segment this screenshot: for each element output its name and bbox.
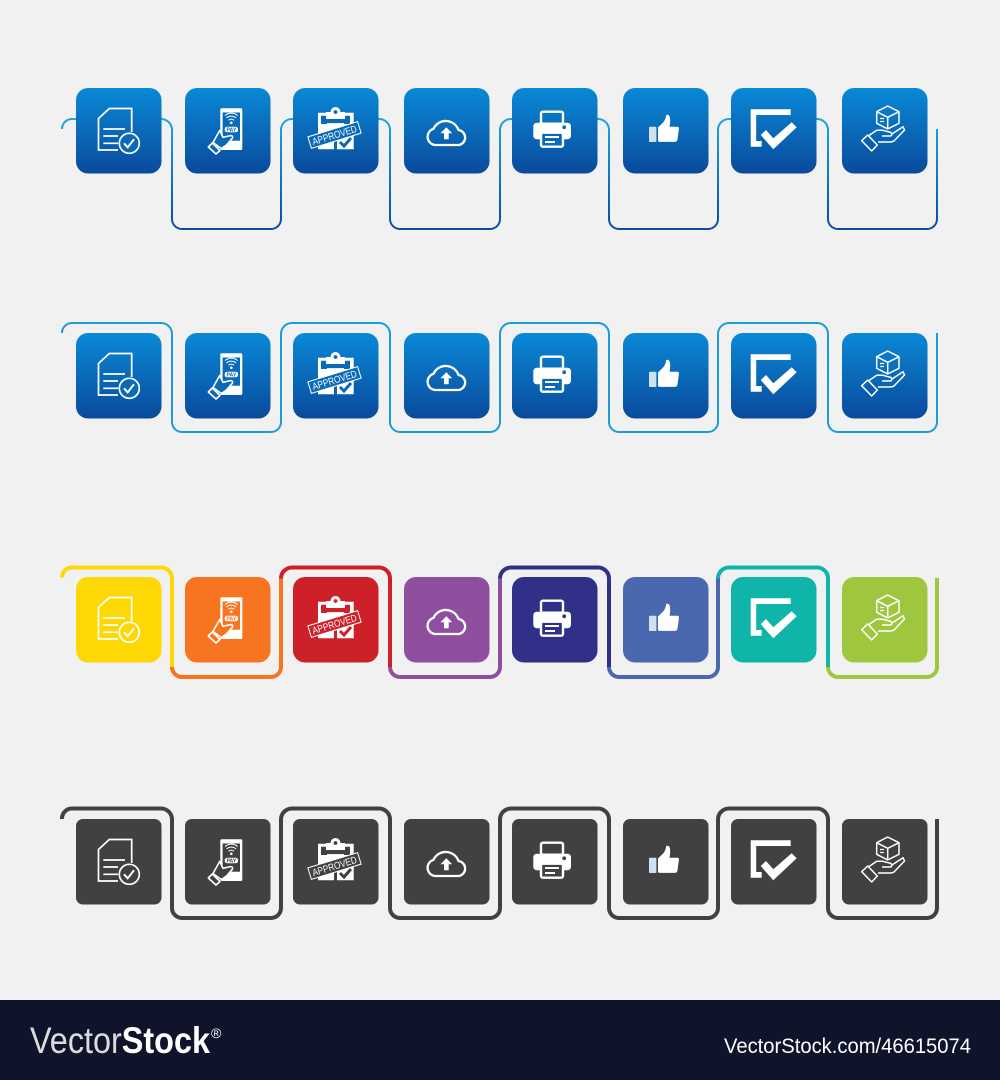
step 1: document approved — [76, 88, 162, 174]
step 3: approved clipboard, red — [293, 577, 378, 662]
registered mark: ® — [211, 1025, 222, 1041]
logo text: VectorStock — [30, 1020, 210, 1061]
step 7: check mark, teal — [731, 577, 816, 662]
connector line: row 1 — [62, 119, 937, 229]
step 6: thumbs up — [623, 819, 708, 904]
step 3: approved clipboard — [293, 333, 378, 418]
step 3: approved clipboard — [293, 819, 378, 904]
step 4: cloud upload — [404, 819, 490, 904]
step 2: mobile payment, orange — [185, 577, 270, 662]
timeline row 2: blue gradient with light blue connector — [62, 323, 937, 432]
step 6: thumbs up — [623, 88, 708, 174]
step 2: mobile payment — [185, 819, 270, 904]
timeline row 4: dark grey — [62, 808, 937, 918]
step 2: mobile payment: PAY — [226, 372, 237, 378]
connector line: row 3 — [62, 568, 937, 677]
step 6: thumbs up, blue — [623, 577, 708, 662]
step 4: cloud upload — [404, 333, 490, 418]
step 8: parcel in hand — [842, 88, 928, 174]
image reference: VectorStock.com/46615074 — [724, 1035, 971, 1058]
step 2: mobile payment, orange: PAY — [226, 616, 237, 622]
connector line: row 4 — [62, 808, 937, 918]
step 1: document approved — [76, 333, 162, 418]
step 3: approved clipboard: APPROVED — [311, 369, 358, 393]
step 5: printer — [512, 88, 598, 174]
timeline row 1: blue gradient with thin connector — [62, 88, 937, 229]
connector line: row 2 — [62, 323, 937, 432]
step 3: approved clipboard: APPROVED — [311, 855, 358, 879]
step 2: mobile payment: PAY — [226, 858, 237, 864]
step 7: check mark — [731, 333, 816, 418]
step 8: parcel in hand — [842, 819, 928, 904]
step 4: cloud upload — [404, 88, 490, 174]
step 4: cloud upload, purple — [404, 577, 490, 662]
step 2: mobile payment: PAY — [226, 127, 237, 133]
step 5: printer — [512, 333, 598, 418]
step 5: printer, navy — [512, 577, 598, 662]
step 1: document approved, yellow — [76, 577, 162, 662]
step 2: mobile payment — [185, 88, 270, 174]
step 5: printer — [512, 819, 598, 904]
step 8: parcel in hand — [842, 333, 928, 418]
step 7: check mark — [731, 88, 816, 174]
timeline row 3: multicolour — [62, 568, 937, 677]
footer bar — [0, 1000, 1000, 1080]
step 3: approved clipboard — [293, 88, 378, 174]
step 3: approved clipboard: APPROVED — [311, 124, 358, 148]
step 1: document approved — [76, 819, 162, 904]
step 6: thumbs up — [623, 333, 708, 418]
step 8: parcel in hand, green — [842, 577, 928, 662]
step 7: check mark — [731, 819, 816, 904]
step 2: mobile payment — [185, 333, 270, 418]
step 3: approved clipboard, red: APPROVED — [311, 613, 358, 637]
